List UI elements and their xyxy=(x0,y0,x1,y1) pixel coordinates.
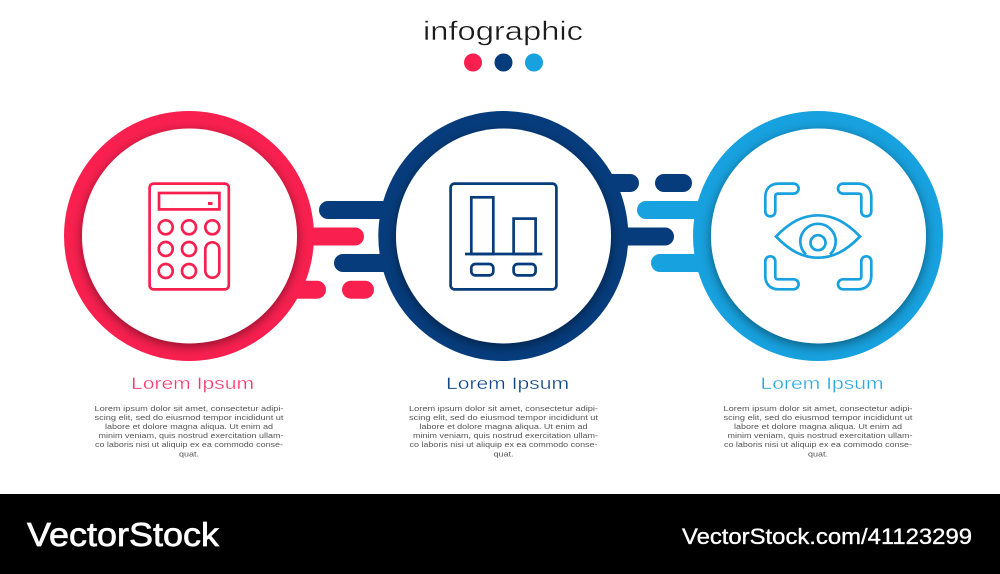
scan corners outline xyxy=(770,189,866,284)
title: infographic xyxy=(423,16,583,46)
column 3: body text: minim veniam, quis nostrud exercitation ullam- xyxy=(728,431,913,440)
column 1: body text: labore et dolore magna aliqua. Ut enim ad xyxy=(105,422,273,431)
column 3: body text xyxy=(724,404,913,458)
column 3: body text: Lorem ipsum dolor sit amet, consectetur adipi- xyxy=(724,404,913,413)
icon: bar chart xyxy=(451,184,556,289)
title colour dots xyxy=(464,54,543,72)
column 3: body text: co laboris nisi ut aliquip ex ea commodo conse- xyxy=(724,440,913,449)
column 3: body text: quat. xyxy=(808,450,828,458)
footer url: VectorStock.com/41123299 xyxy=(682,524,972,549)
column 2: body text xyxy=(409,404,599,458)
column 3: body text: labore et dolore magna aliqua. Ut enim ad xyxy=(734,422,902,431)
connector bars: navy to blue xyxy=(590,183,730,263)
column 3: heading: Lorem Ipsum xyxy=(760,374,884,393)
column 2: body text: quat. xyxy=(494,450,514,458)
column 1: body text: Lorem ipsum dolor sit amet, consectetur adipi- xyxy=(94,404,284,413)
column 2: body text: scing elit, sed do eiusmod tempor incididunt ut xyxy=(409,413,598,422)
icon: eye scan xyxy=(770,189,866,284)
column 1: body text: quat. xyxy=(179,450,199,458)
column 1: body text: co laboris nisi ut aliquip ex ea commodo conse- xyxy=(95,440,284,449)
icon: calculator xyxy=(150,184,229,289)
column 2: body text: minim veniam, quis nostrud exercitation ullam- xyxy=(413,431,599,440)
column 1: body text: scing elit, sed do eiusmod tempor incididunt ut xyxy=(94,413,284,422)
footer bar xyxy=(0,494,1000,574)
column 1: body text: minim veniam, quis nostrud exercitation ullam- xyxy=(98,431,284,440)
footer logo: VectorStock xyxy=(27,516,220,553)
circle: blue ring xyxy=(693,111,943,361)
scan corners inner xyxy=(770,189,866,284)
column 2: body text: Lorem ipsum dolor sit amet, consectetur adipi- xyxy=(409,404,599,413)
column 2: heading: Lorem Ipsum xyxy=(446,374,569,393)
eye xyxy=(776,215,860,258)
column 2: body text: labore et dolore magna aliqua. Ut enim ad xyxy=(420,422,588,431)
circle: pink ring xyxy=(64,111,314,361)
connector bars: pink to navy xyxy=(280,210,400,290)
column 1: heading: Lorem Ipsum xyxy=(131,374,254,393)
column 2: body text: co laboris nisi ut aliquip ex ea commodo conse- xyxy=(410,440,598,449)
column 1: body text xyxy=(94,404,284,458)
circle: navy ring xyxy=(378,111,628,361)
column 3: body text: scing elit, sed do eiusmod tempor incididunt ut xyxy=(724,413,912,422)
